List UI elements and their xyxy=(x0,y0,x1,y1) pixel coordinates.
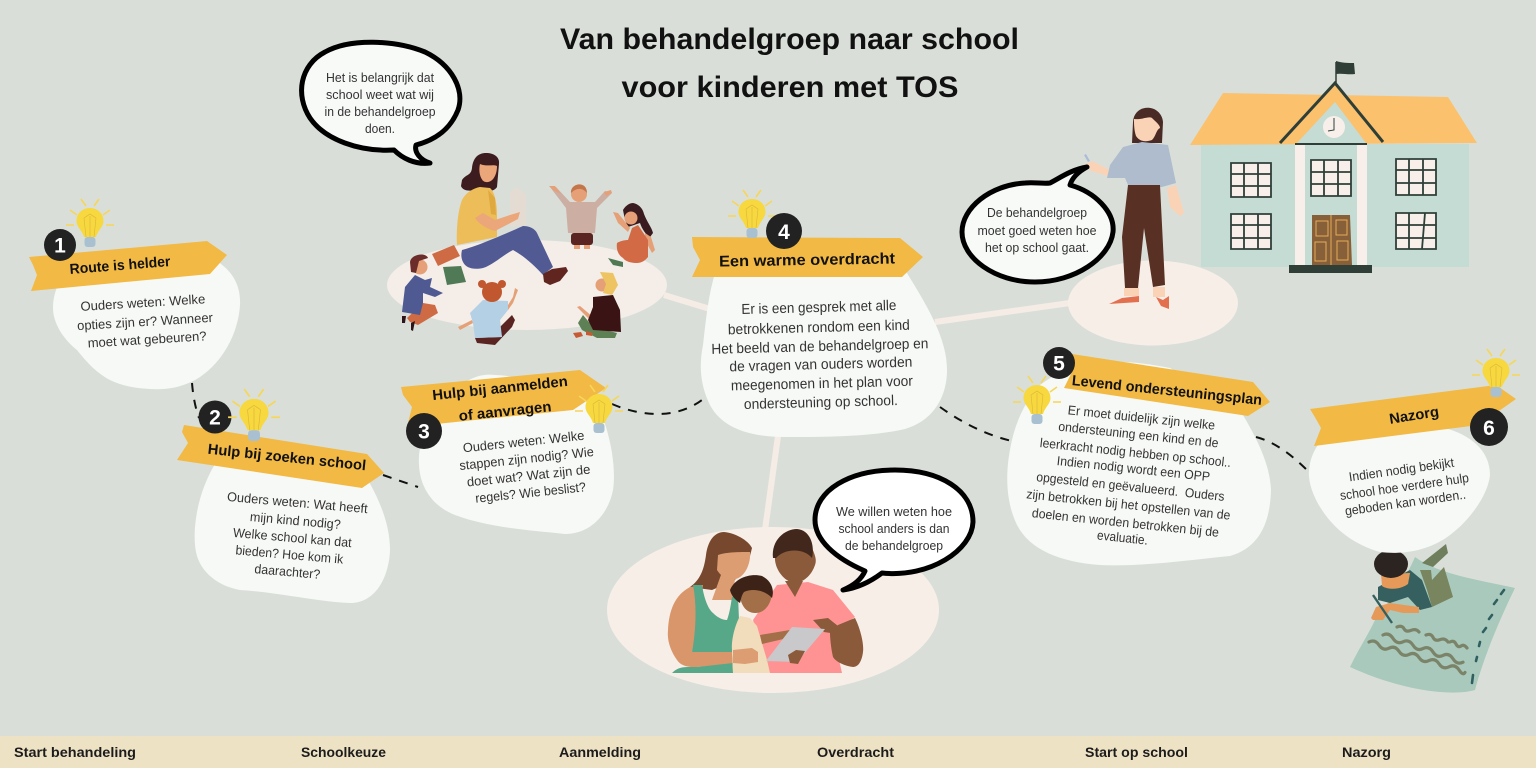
teacher xyxy=(457,153,568,285)
timeline labels xyxy=(14,744,1391,760)
ribbon title 6: Nazorg xyxy=(1388,404,1440,428)
text 2: daarachter? xyxy=(254,561,321,582)
text 4: Er is een gesprek met alle xyxy=(741,298,897,318)
text 5: doelen en worden betrokken bij de xyxy=(1031,505,1220,540)
text 5: evaluatie. xyxy=(1096,527,1149,548)
boy xyxy=(1371,544,1453,623)
illustration: school building xyxy=(1190,61,1477,273)
text 6: geboden kan worden.. xyxy=(1344,487,1467,518)
number badge 5 xyxy=(1043,347,1075,379)
text panel 4 xyxy=(701,270,947,437)
icon: light bulb 1 xyxy=(66,199,114,247)
text 5: ondersteuning een kind en de xyxy=(1058,419,1219,450)
step 4 xyxy=(692,190,947,437)
girl with hair buns xyxy=(458,280,518,345)
timeline labels: Aanmelding xyxy=(559,744,641,760)
timeline band xyxy=(0,736,1536,768)
number badge 6 xyxy=(1470,408,1508,446)
icon: light bulb 4 xyxy=(728,190,776,238)
speech bubble: parents: school anders is dan xyxy=(838,521,950,536)
text panel 6 xyxy=(1309,428,1490,553)
speech bubble: teacher standing: moet goed weten hoe xyxy=(978,223,1096,238)
text 5: Er moet duidelijk zijn welke xyxy=(1067,402,1216,433)
child xyxy=(730,575,792,673)
speech bubble: teacher: in de behandelgroep xyxy=(324,104,436,119)
timeline labels: Overdracht xyxy=(817,744,894,760)
text panel 3 xyxy=(419,375,614,534)
mother xyxy=(668,532,758,673)
speech bubble: teacher: school weet wat wij xyxy=(326,87,434,102)
number badge 2: 2 xyxy=(209,406,221,430)
text 4 xyxy=(711,298,929,413)
step 3 xyxy=(401,370,623,534)
text 4: Het beeld van de behandelgroep en xyxy=(711,336,929,358)
text 6 xyxy=(1339,455,1470,518)
step 1 xyxy=(29,199,240,389)
text 3 xyxy=(459,428,594,506)
girl in orange dress xyxy=(608,203,655,267)
ribbon 3 xyxy=(401,370,606,427)
ribbon title 1: Route is helder xyxy=(69,254,171,278)
number badge 4: 4 xyxy=(778,221,790,244)
ribbon 5 xyxy=(1064,354,1270,416)
title xyxy=(560,23,1019,104)
speech bubble: teacher standing: het op school gaat. xyxy=(985,240,1089,255)
text 1: moet wat gebeuren? xyxy=(87,328,207,351)
text panel 5 xyxy=(1007,362,1271,565)
speech bubble: teacher: doen. xyxy=(365,121,395,136)
icon: light bulb 2 xyxy=(228,389,280,441)
title: voor kinderen met TOS xyxy=(622,71,958,104)
title: Van behandelgroep naar school xyxy=(560,23,1019,56)
windows xyxy=(1231,159,1436,249)
timeline labels: Start behandeling xyxy=(14,744,136,760)
father xyxy=(753,529,863,673)
illustration: boy writing on paper xyxy=(1350,544,1515,693)
text 2: Ouders weten: Wat heeft xyxy=(227,489,369,516)
text 5: Indien nodig wordt een OPP xyxy=(1056,453,1211,484)
door xyxy=(1312,215,1352,265)
text 1: opties zijn er? Wanneer xyxy=(77,310,214,333)
speech bubble: teacher standing xyxy=(962,167,1113,282)
text 1 xyxy=(75,291,215,351)
text 4: ondersteuning op school. xyxy=(744,393,898,413)
flag xyxy=(1336,61,1355,83)
text 5: zijn betrokken bij het opstellen van de xyxy=(1026,486,1231,523)
speech bubble: teacher: Het is belangrijk dat xyxy=(326,70,434,85)
speech bubble: teacher xyxy=(302,42,460,163)
blond boy in black shirt xyxy=(573,272,621,338)
ribbon title 3: Hulp bij aanmelden xyxy=(432,374,569,404)
step 2 xyxy=(177,389,390,603)
illustration: teacher standing on ellipse xyxy=(1068,108,1238,346)
number badge 3: 3 xyxy=(418,420,430,444)
dashed route connectors xyxy=(192,383,1309,487)
ribbon title 3 xyxy=(432,374,569,425)
woman xyxy=(1084,108,1184,309)
ribbon 4 xyxy=(692,237,923,277)
text panel 1 xyxy=(53,260,240,389)
timeline labels: Start op school xyxy=(1085,744,1188,760)
illustration: parents and child with tablet xyxy=(607,527,939,693)
ribbon title 4: Een warme overdracht xyxy=(719,250,895,271)
step 6 xyxy=(1309,349,1520,553)
text 3: doet wat? Wat zijn de xyxy=(466,462,591,489)
number badge 1: 1 xyxy=(54,234,66,258)
text 5: leerkracht nodig hebben op school.. xyxy=(1039,435,1232,470)
speech bubble: parents: de behandelgroep xyxy=(845,538,943,553)
text 1: Ouders weten: Welke xyxy=(80,291,206,314)
ribbon title 5: Levend ondersteuningsplan xyxy=(1071,373,1263,409)
ribbon 2 xyxy=(177,425,384,488)
paper xyxy=(1350,557,1515,693)
ribbon title 3: of aanvragen xyxy=(458,399,552,425)
text 2: Welke school kan dat xyxy=(232,525,353,550)
text panel 2 xyxy=(195,450,390,603)
text 6: Indien nodig bekijkt xyxy=(1348,455,1455,484)
ribbon 6 xyxy=(1310,385,1516,446)
ribbon 1 xyxy=(29,241,227,291)
text 2: bieden? Hoe kom ik xyxy=(235,542,344,567)
number badge 5: 5 xyxy=(1053,352,1065,376)
icon: light bulb 6 xyxy=(1472,349,1520,397)
timeline labels: Schoolkeuze xyxy=(301,744,386,760)
icon: light bulb 5 xyxy=(1013,376,1061,424)
text 6: school hoe verdere hulp xyxy=(1339,470,1470,503)
books on the floor xyxy=(432,245,466,285)
text 2 xyxy=(227,489,369,582)
gable xyxy=(1280,83,1383,144)
number badge 2 xyxy=(198,400,232,434)
number badge 4 xyxy=(766,213,802,249)
timeline labels: Nazorg xyxy=(1342,744,1391,760)
steps xyxy=(1289,265,1372,273)
text 3: stappen zijn nodig? Wie xyxy=(459,444,594,473)
number badge 3 xyxy=(406,413,442,449)
ribbon title 2: Hulp bij zoeken school xyxy=(207,442,367,474)
text 5 xyxy=(1026,402,1232,548)
text 3: regels? Wie beslist? xyxy=(475,479,587,506)
speech bubble: parents: We willen weten hoe xyxy=(836,504,952,519)
text 5: opgesteld en geëvalueerd. Ouders xyxy=(1036,469,1226,504)
step 5 xyxy=(1007,347,1271,565)
number badge 6: 6 xyxy=(1483,417,1495,440)
boy with blue sweater xyxy=(402,255,443,331)
text 3: Ouders weten: Welke xyxy=(462,428,585,455)
child with raised arms xyxy=(549,184,612,249)
walls xyxy=(1201,144,1469,267)
pillars xyxy=(1295,145,1367,265)
speech bubble: parents xyxy=(815,470,973,590)
number badge 1 xyxy=(44,229,76,261)
text 4: meegenomen in het plan voor xyxy=(731,374,913,394)
text 2: mijn kind nodig? xyxy=(249,509,341,532)
text 4: de vragen van ouders worden xyxy=(729,355,913,375)
speech bubble: teacher standing: De behandelgroep xyxy=(987,205,1087,220)
text 4: betrokkenen rondom een kind xyxy=(728,318,910,338)
connector lines between step 4 and the illustrations xyxy=(664,295,1070,530)
roof xyxy=(1190,93,1477,145)
tablet xyxy=(766,627,825,662)
icon: light bulb 3 xyxy=(575,385,623,433)
illustration: teacher with children in a circle xyxy=(387,153,667,345)
clock xyxy=(1323,116,1345,138)
